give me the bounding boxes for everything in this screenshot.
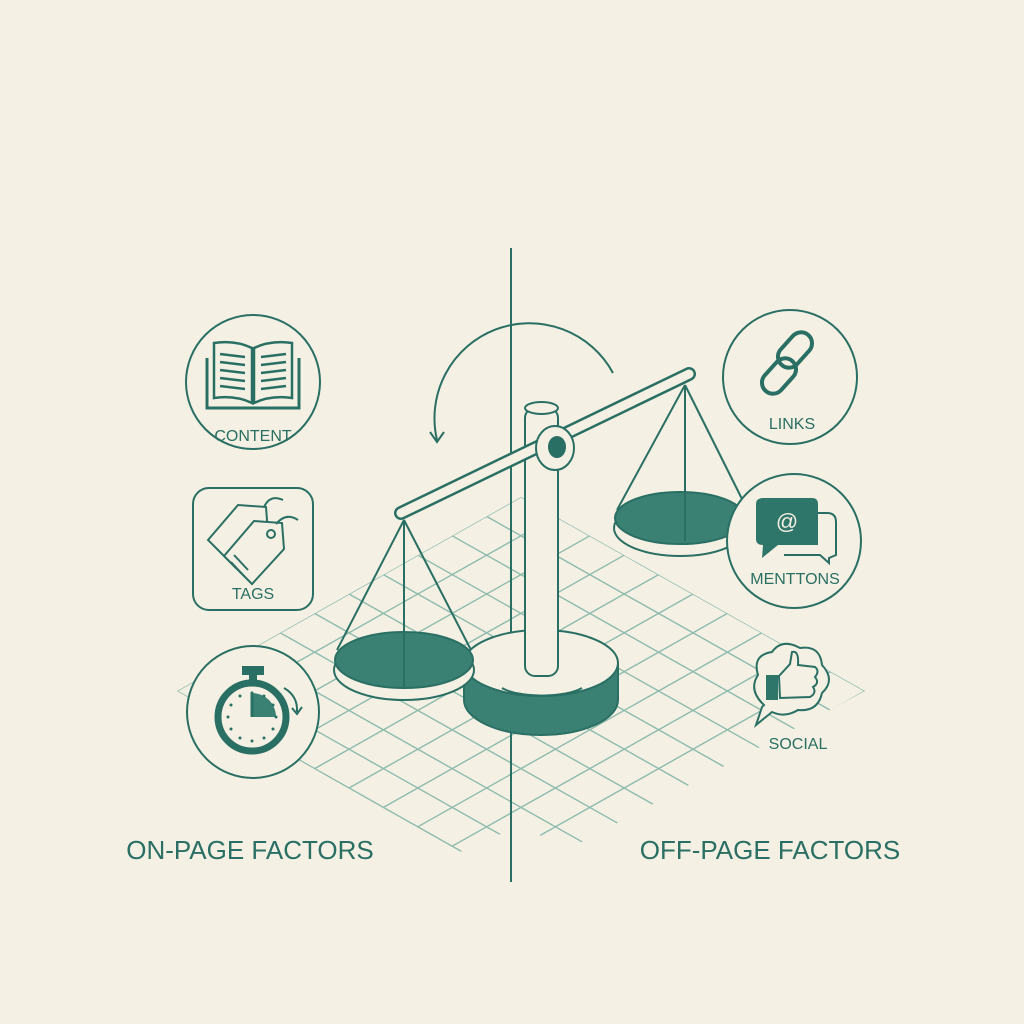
rotation arrow bbox=[430, 323, 613, 442]
beam bbox=[401, 374, 689, 513]
scale bbox=[334, 374, 746, 735]
icon: tags: TAGS bbox=[232, 586, 274, 603]
icon: mentions bbox=[727, 474, 861, 608]
right pan bbox=[614, 385, 746, 556]
icon: tags bbox=[193, 488, 313, 610]
icon: content: CONTENT bbox=[214, 428, 292, 445]
icon: social: SOCIAL bbox=[769, 736, 827, 753]
icon: social bbox=[754, 644, 829, 753]
pole bbox=[525, 402, 558, 676]
grid floor bbox=[177, 497, 865, 885]
icon: mentions: MENTTONS bbox=[750, 571, 840, 588]
left pan bbox=[334, 520, 474, 700]
icon: content bbox=[186, 315, 320, 449]
label: off-page: OFF-PAGE FACTORS bbox=[640, 835, 900, 865]
icon: stopwatch bbox=[187, 646, 319, 778]
icon: links: LINKS bbox=[769, 416, 815, 433]
divider line bbox=[510, 248, 512, 882]
icon: links bbox=[723, 310, 857, 444]
base bbox=[464, 630, 618, 735]
pivot bbox=[536, 426, 574, 470]
icon: mentions: @ bbox=[776, 509, 798, 534]
label: on-page: ON-PAGE FACTORS bbox=[126, 835, 374, 865]
